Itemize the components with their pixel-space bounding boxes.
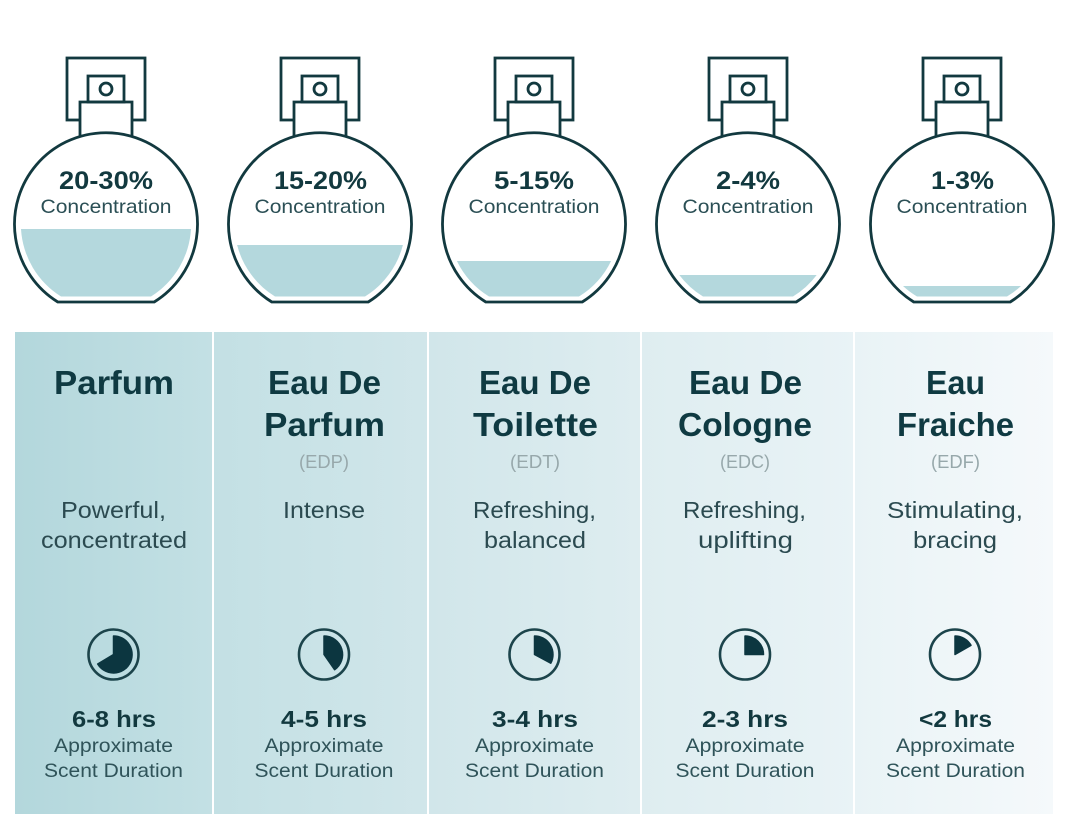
panel: Eau Fraiche: Scent Duration (886, 760, 1025, 782)
panel: Eau De Cologne: Eau De (689, 364, 802, 401)
bottle: Eau De Cologne 2-4% (656, 58, 840, 302)
panel: Eau De Toilette: Eau De (479, 364, 591, 401)
panel: Eau De Parfum: Approximate (264, 735, 384, 757)
panel: Eau De Cologne: 2-3 hrs (702, 706, 788, 732)
bottle: Eau Fraiche 1-3%: Concentration (896, 196, 1028, 218)
panel: Eau Fraiche: Eau (926, 364, 985, 401)
panel: Eau Fraiche: (EDF) (931, 452, 980, 472)
panel: Eau Fraiche (855, 332, 1053, 814)
panel: Eau De Cologne: Cologne (678, 406, 812, 443)
panel: Parfum: Powerful, (61, 497, 166, 523)
bottle: Parfum 20-30%: 20-30% (59, 167, 153, 195)
bottle: Parfum 20-30%: Concentration (40, 196, 172, 218)
panel: Eau De Toilette: 3-4 hrs (492, 706, 578, 732)
panel: Parfum: Approximate (54, 735, 173, 757)
panel: Eau De Cologne: Approximate (686, 735, 804, 757)
panel: Eau Fraiche: bracing (913, 527, 997, 553)
bottle: Eau De Parfum 15-20% (228, 58, 412, 302)
bottle: Eau De Toilette 5-15% (442, 58, 626, 302)
panel: Eau De Parfum: Parfum (264, 406, 385, 443)
panel: Eau De Parfum (214, 332, 427, 814)
bottle: Eau De Cologne 2-4%: Concentration (682, 196, 814, 218)
panel: Parfum (15, 332, 212, 814)
bottle: Eau De Parfum 15-20%: Concentration (254, 196, 386, 218)
panel: Parfum: concentrated (41, 527, 187, 553)
panel: Eau De Parfum: Intense (283, 497, 365, 523)
bottle: Eau De Cologne 2-4%: 2-4% (716, 167, 780, 195)
panel: Eau De Parfum: (EDP) (299, 452, 349, 472)
bottle: Parfum 20-30% (14, 58, 197, 302)
panel: Parfum: 6-8 hrs (72, 706, 156, 732)
panel: Eau De Toilette: Toilette (473, 406, 598, 443)
panel: Eau De Toilette: (EDT) (510, 452, 560, 472)
panel: Eau De Parfum: Scent Duration (254, 760, 394, 782)
panel: Eau De Cologne: uplifting (698, 527, 793, 553)
panel: Eau De Toilette: Scent Duration (465, 760, 604, 782)
panel: Eau De Toilette: Approximate (475, 735, 594, 757)
panel: Eau De Toilette (429, 332, 640, 814)
panel: Eau De Parfum: Eau De (268, 364, 381, 401)
bottle: Eau De Toilette 5-15%: Concentration (468, 196, 600, 218)
panel: Eau De Cologne (642, 332, 853, 814)
bottle: Eau Fraiche 1-3% (870, 58, 1054, 302)
panel: Eau Fraiche: Approximate (896, 735, 1015, 757)
panel: Eau De Cologne: Scent Duration (676, 760, 814, 782)
panel: Eau De Cologne: (EDC) (720, 452, 770, 472)
panel: Eau Fraiche: Stimulating, (887, 497, 1023, 523)
panel: Eau De Toilette: balanced (484, 527, 586, 553)
panel: Eau De Parfum: 4-5 hrs (281, 706, 367, 732)
bottle: Eau Fraiche 1-3%: 1-3% (931, 167, 994, 195)
bottle: Eau De Parfum 15-20%: 15-20% (274, 167, 367, 195)
panel: Eau Fraiche: <2 hrs (919, 706, 992, 732)
panel: Eau De Cologne: Refreshing, (683, 497, 806, 523)
panel: Parfum: Scent Duration (44, 760, 183, 782)
panel: Parfum: Parfum (54, 364, 174, 401)
panel: Eau De Toilette: Refreshing, (473, 497, 596, 523)
bottle: Eau De Toilette 5-15%: 5-15% (494, 167, 574, 195)
panel: Eau Fraiche: Fraiche (897, 406, 1014, 443)
